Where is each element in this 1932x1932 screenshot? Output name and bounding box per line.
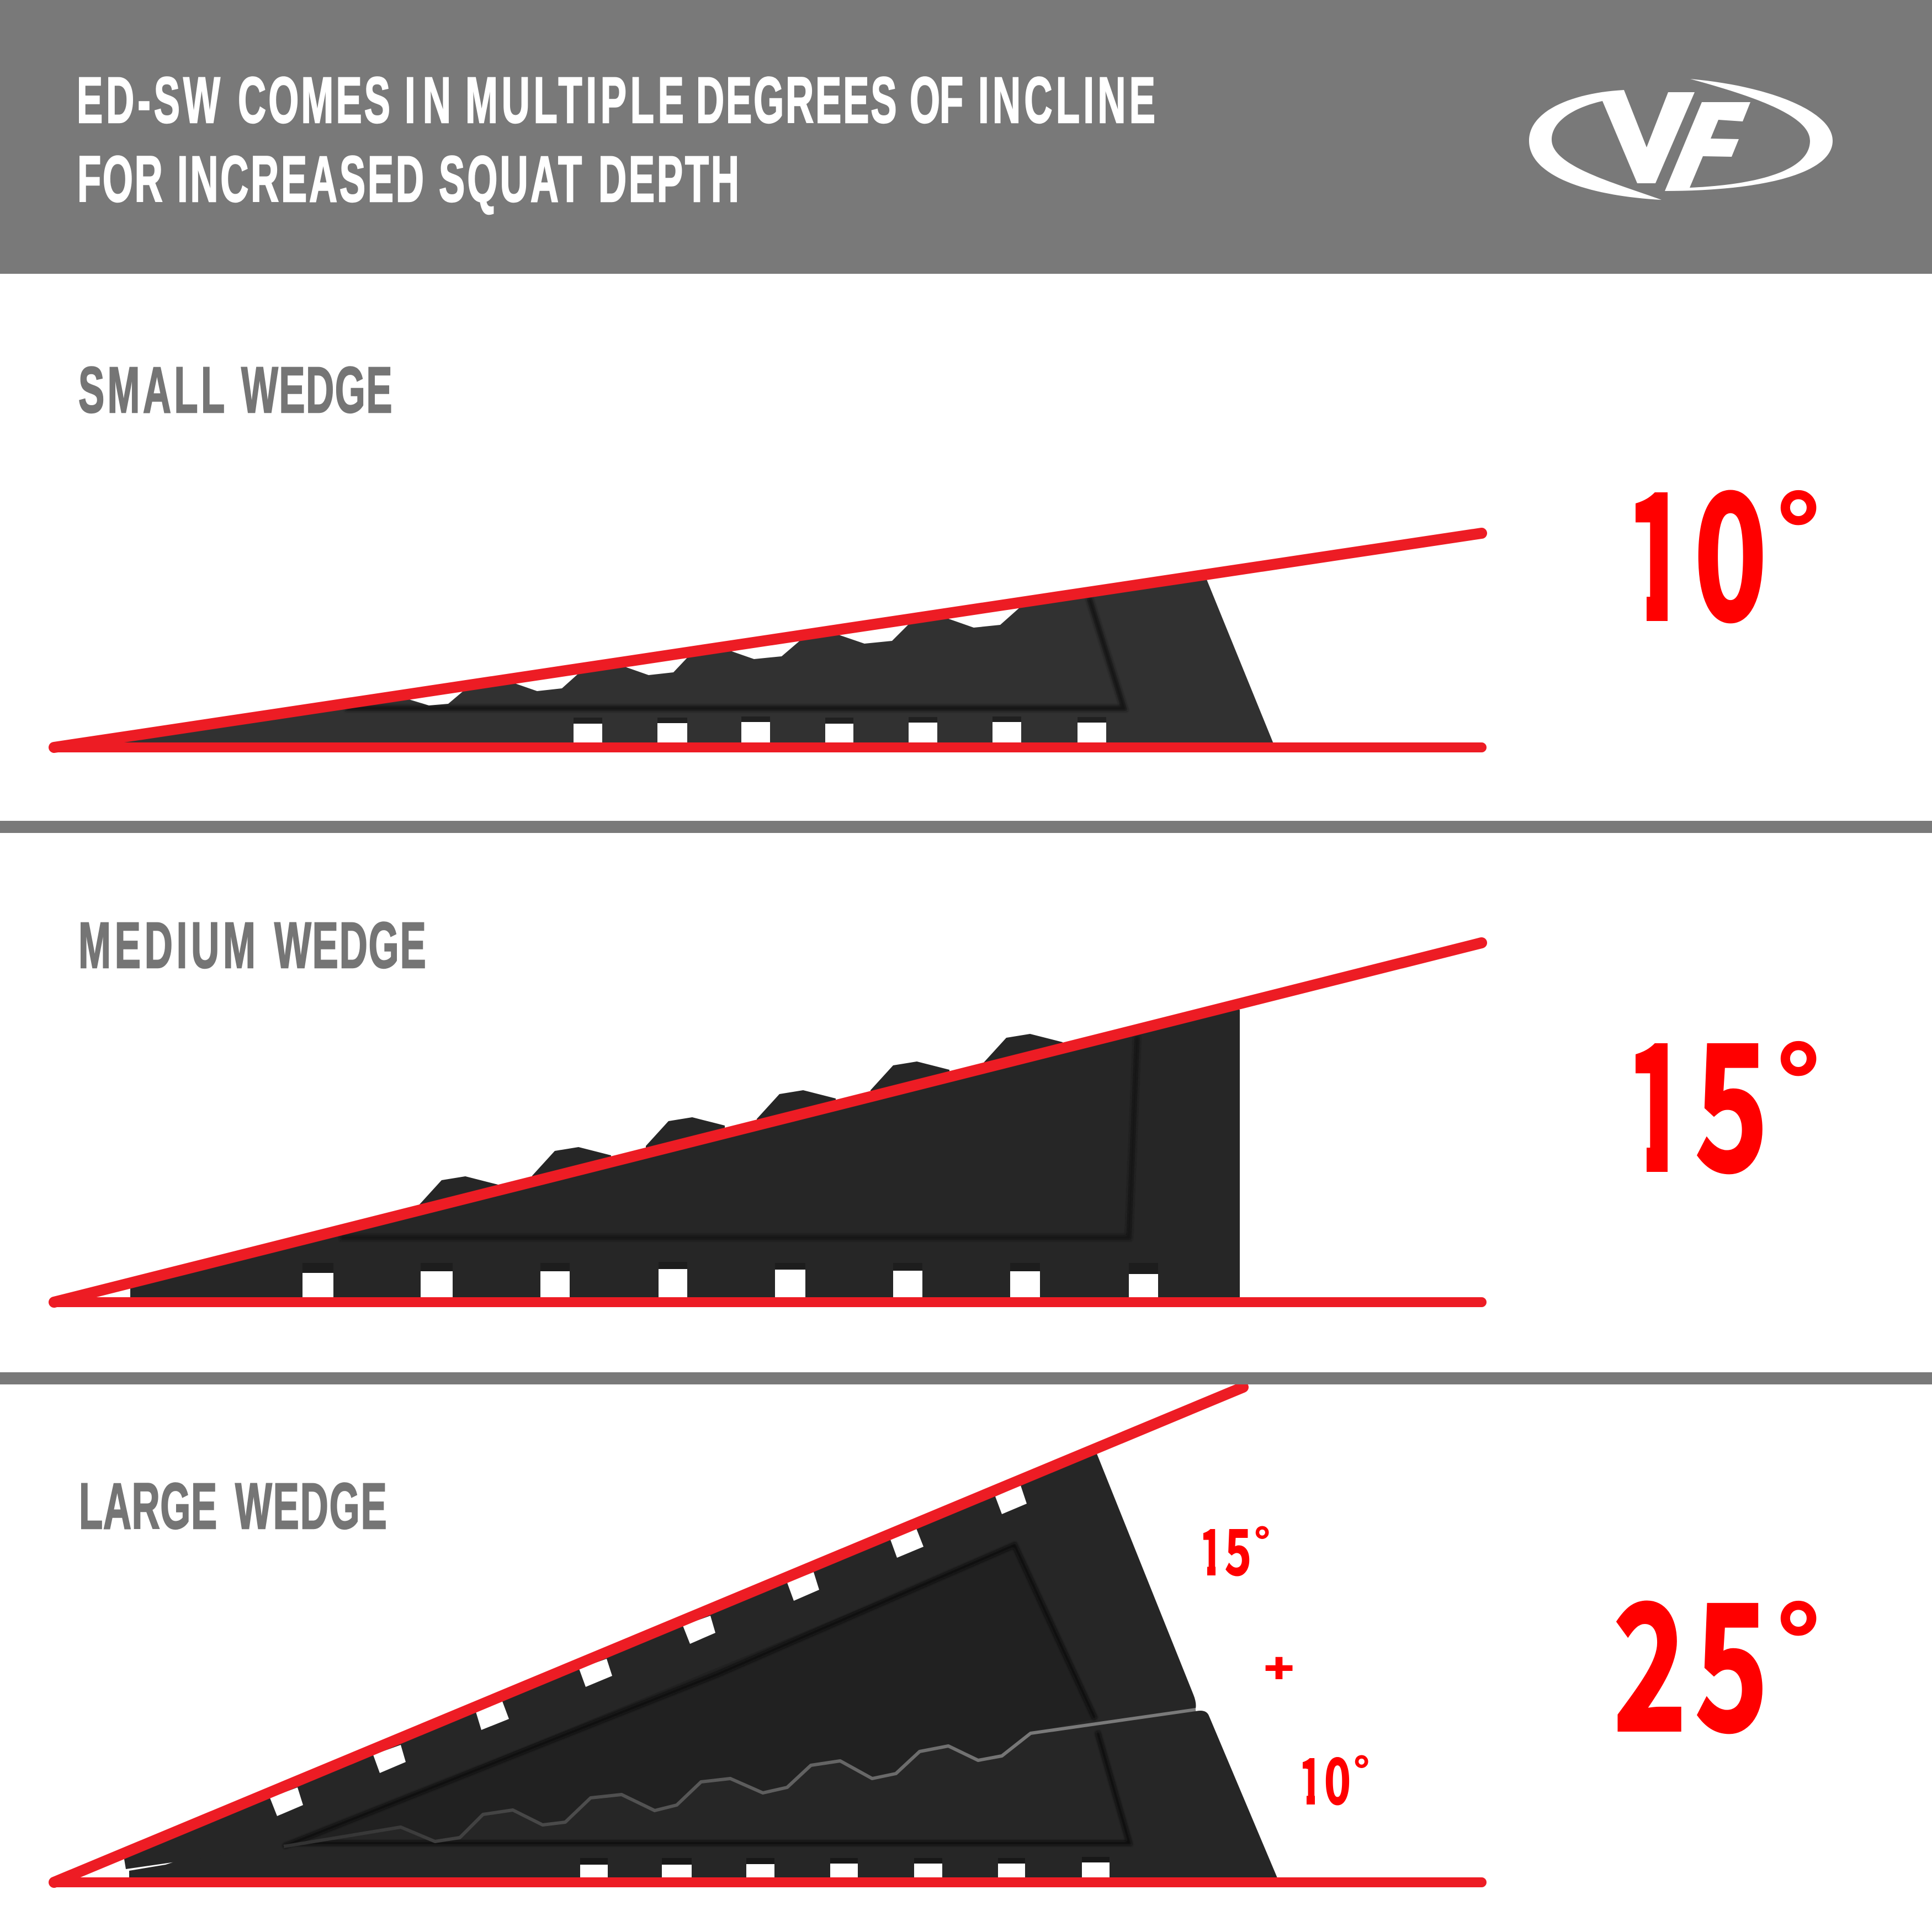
red angle lines large xyxy=(54,1387,1482,1882)
header band xyxy=(0,0,1932,274)
component label: 10 degrees: 0 xyxy=(1324,1731,1351,1822)
title: OF xyxy=(910,63,963,136)
slots small xyxy=(574,716,1106,744)
title: ED-SW xyxy=(77,63,220,136)
heading: large wedge xyxy=(79,1469,387,1542)
angle value: 10 degrees: ° xyxy=(1776,468,1820,591)
angle value: 15 degrees: 1 xyxy=(1625,969,1689,1220)
heading: small wedge xyxy=(78,353,392,426)
title: INCREASED xyxy=(177,142,424,215)
title: INCLINE xyxy=(978,63,1155,136)
component label: 15 degrees: ° xyxy=(1254,1519,1270,1563)
wedge body small xyxy=(54,574,1275,747)
angle value: 25 degrees: 5 xyxy=(1695,1528,1768,1780)
component label: 10 degrees: ° xyxy=(1354,1748,1370,1792)
slots large xyxy=(580,1857,1110,1879)
diagram: medium wedge xyxy=(54,943,1482,1302)
title: MULTIPLE xyxy=(465,63,684,136)
angle value: 25 degrees xyxy=(1613,1528,1820,1780)
component label: 10 degrees xyxy=(1303,1755,1368,1805)
title: FOR xyxy=(77,142,163,215)
red angle lines small xyxy=(54,533,1482,747)
angle value: 10 degrees: 0 xyxy=(1694,418,1767,670)
icon: VF logo xyxy=(1529,79,1833,200)
notches small xyxy=(391,603,1025,705)
red angle lines medium xyxy=(54,943,1482,1302)
component label: 10 degrees: 1 xyxy=(1299,1731,1322,1822)
heading: medium wedge: MEDIUM xyxy=(78,909,256,981)
heading: small wedge: WEDGE xyxy=(241,353,392,426)
lower wedge body xyxy=(129,1706,1277,1878)
heading: small wedge: SMALL xyxy=(78,353,225,426)
title: DEGREES xyxy=(696,63,897,136)
slots medium xyxy=(302,1262,1158,1298)
title: COMES xyxy=(238,63,390,136)
divider xyxy=(0,1372,1932,1384)
heading: large wedge: WEDGE xyxy=(235,1469,387,1542)
angle value: 25 degrees: 2 xyxy=(1613,1528,1686,1780)
diagram: large wedge xyxy=(54,1387,1482,1882)
component label: 15 degrees xyxy=(1203,1526,1269,1577)
title: DEPTH xyxy=(598,142,739,215)
wedge body medium xyxy=(130,1004,1240,1298)
component label: 15 degrees: 1 xyxy=(1199,1502,1223,1593)
title xyxy=(77,63,1155,215)
angle value: 15 degrees: ° xyxy=(1776,1019,1820,1142)
heading: medium wedge: WEDGE xyxy=(274,909,426,981)
angle value: 15 degrees xyxy=(1636,1041,1816,1175)
title: IN xyxy=(405,63,451,136)
component label: 15 degrees: 5 xyxy=(1225,1502,1251,1593)
angle value: 25 degrees: ° xyxy=(1776,1579,1820,1702)
heading: medium wedge xyxy=(78,909,426,981)
plus sign: + xyxy=(1264,1644,1294,1691)
angle value: 15 degrees: 5 xyxy=(1695,969,1768,1220)
angle value: 10 degrees xyxy=(1636,490,1816,624)
diagram: small wedge xyxy=(54,533,1482,747)
angle value: 10 degrees: 1 xyxy=(1625,418,1689,670)
divider xyxy=(0,821,1932,833)
heading: large wedge: LARGE xyxy=(79,1469,217,1542)
upper wedge body xyxy=(123,1450,1196,1869)
square slots on top edge xyxy=(270,1485,1027,1816)
title: SQUAT xyxy=(439,142,582,215)
seam line between wedges xyxy=(284,1710,1196,1846)
